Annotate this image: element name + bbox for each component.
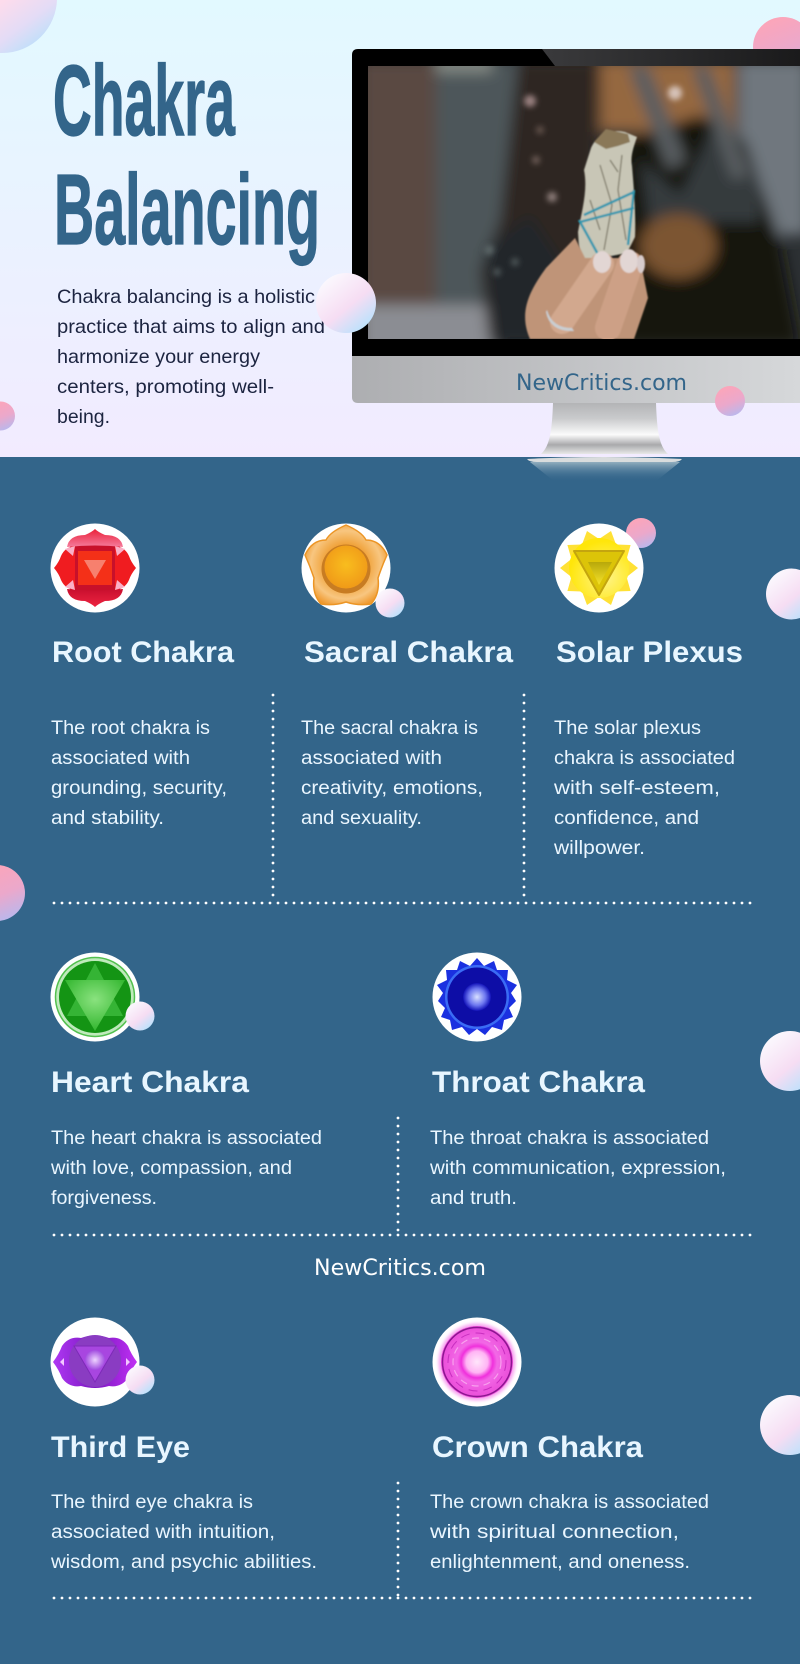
bubble: heart — [126, 1002, 154, 1030]
block: solar plexus: The solar plexus — [554, 718, 701, 739]
intro text: centers, promoting well- — [57, 376, 274, 398]
block: solar plexus: confidence, and — [554, 808, 699, 829]
icon: sacral chakra — [302, 524, 390, 612]
monitor stand — [541, 403, 668, 454]
block: solar plexus: chakra is associated — [554, 748, 735, 769]
intro text: harmonize your energy — [57, 346, 260, 368]
icon: solar plexus chakra — [554, 524, 644, 612]
block: sacral chakra: and sexuality. — [301, 808, 422, 829]
block: root chakra: and stability. — [51, 808, 164, 829]
bubble: left middle — [0, 865, 25, 921]
bubble: top left — [0, 0, 57, 53]
block: heart chakra: with love, compassion, and — [50, 1158, 292, 1179]
title: Balancing — [54, 154, 320, 266]
block: heart chakra — [50, 1066, 322, 1209]
block: throat chakra — [429, 1066, 726, 1209]
monitor body — [352, 356, 800, 403]
icon: heart chakra — [50, 952, 140, 1042]
block: third eye: associated with intuition, — [51, 1522, 275, 1543]
block: sacral chakra: creativity, emotions, — [301, 778, 483, 799]
block: crown chakra — [429, 1431, 709, 1573]
block: root chakra: associated with — [51, 748, 190, 769]
bubble: mid header — [316, 273, 376, 333]
photo: hand holding sage bundle — [368, 66, 800, 339]
block: root chakra: The root chakra is — [51, 718, 210, 739]
intro text: being. — [57, 406, 110, 428]
icon: third eye chakra — [50, 1318, 140, 1406]
bubble: top right — [753, 17, 800, 77]
block: crown chakra: with spiritual connection, — [429, 1522, 679, 1543]
block: crown chakra: Crown Chakra — [432, 1431, 643, 1464]
watermark: NewCritics.com — [314, 1256, 486, 1281]
bubble: third eye — [126, 1366, 154, 1394]
block: throat chakra: The throat chakra is associated — [430, 1128, 709, 1149]
bubble: sacral — [376, 588, 404, 618]
intro text: Chakra balancing is a holistic — [57, 286, 315, 308]
bubble: right upper — [766, 568, 800, 620]
block: sacral chakra: associated with — [301, 748, 442, 769]
block: root chakra: Root Chakra — [52, 636, 234, 669]
block: third eye: The third eye chakra is — [51, 1492, 253, 1513]
bubble: right lower — [760, 1395, 800, 1455]
block: heart chakra: Heart Chakra — [51, 1066, 249, 1099]
block: third eye: wisdom, and psychic abilities. — [50, 1552, 317, 1573]
icon: crown chakra — [432, 1318, 522, 1406]
block: root chakra — [51, 636, 234, 829]
block: throat chakra: with communication, expression, — [429, 1158, 726, 1179]
block: heart chakra: forgiveness. — [51, 1188, 157, 1209]
block: heart chakra: The heart chakra is associated — [51, 1128, 322, 1149]
block: throat chakra: Throat Chakra — [432, 1066, 645, 1099]
icon: throat chakra — [432, 952, 522, 1042]
content panel background — [0, 457, 800, 1664]
block: sacral chakra: Sacral Chakra — [304, 636, 513, 669]
monitor stand reflection — [530, 462, 680, 482]
block: crown chakra: enlightenment, and oneness. — [430, 1552, 690, 1573]
header background — [0, 0, 800, 458]
title: Chakra — [53, 45, 236, 157]
block: sacral chakra — [301, 636, 513, 829]
block: solar plexus: with self-esteem, — [553, 778, 720, 799]
block: third eye — [50, 1431, 317, 1573]
icon: root chakra — [50, 524, 140, 612]
block: third eye: Third Eye — [51, 1431, 190, 1464]
monitor — [352, 49, 800, 482]
hand — [525, 238, 648, 339]
bubble: on monitor — [715, 386, 745, 416]
sage bundle — [578, 129, 637, 262]
bubble: small left — [0, 402, 15, 430]
title — [53, 45, 320, 266]
block: crown chakra: The crown chakra is associated — [430, 1492, 709, 1513]
bubble: right middle — [760, 1031, 800, 1091]
block: solar plexus: willpower. — [553, 838, 645, 859]
bubble: solar — [626, 518, 656, 548]
intro text: practice that aims to align and — [57, 316, 325, 338]
block: sacral chakra: The sacral chakra is — [301, 718, 478, 739]
block: solar plexus — [553, 636, 743, 859]
block: solar plexus: Solar Plexus — [556, 636, 743, 669]
intro text — [57, 286, 325, 428]
block: root chakra: grounding, security, — [51, 778, 227, 799]
block: throat chakra: and truth. — [430, 1188, 517, 1209]
monitor caption: NewCritics.com — [516, 371, 687, 396]
